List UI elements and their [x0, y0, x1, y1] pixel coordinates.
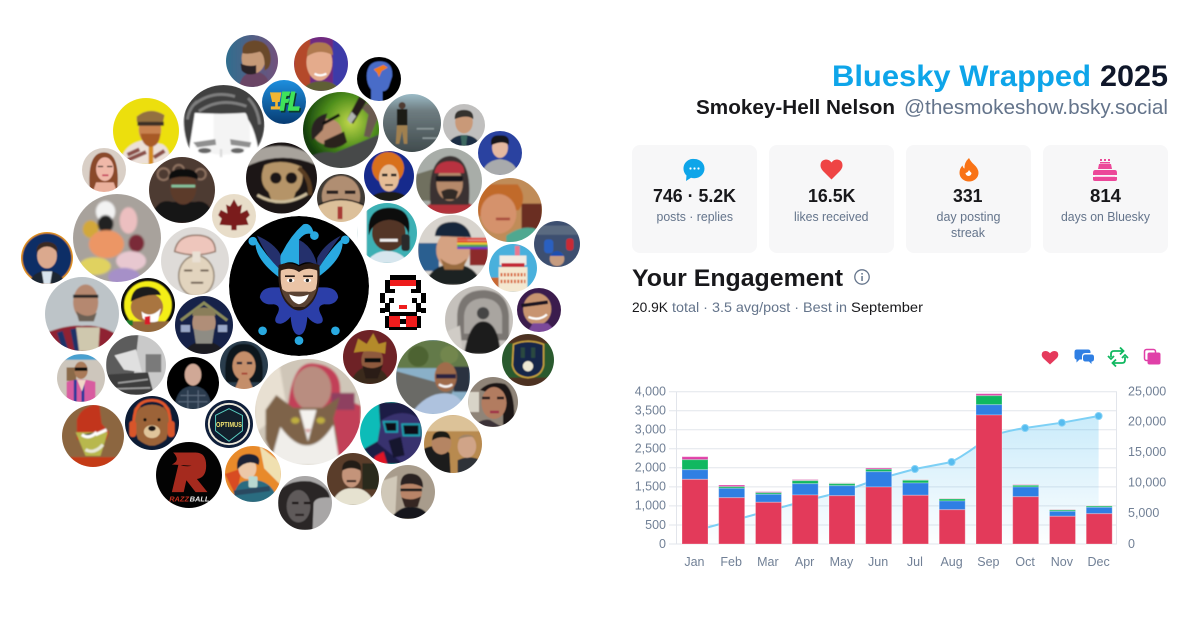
- right axis labels: 25,000: [1128, 384, 1166, 398]
- stat value: 746 · 5.2K: [653, 186, 736, 206]
- left axis labels: 4,000: [635, 384, 666, 398]
- avatar: Canadian Hickory maple leaf: [211, 193, 257, 239]
- avatar: sketched man portrait: [182, 85, 264, 158]
- chart legend: [1042, 348, 1160, 366]
- avatar: cartoon boy on yellow: [120, 277, 176, 333]
- cumulative area: [694, 416, 1099, 544]
- bar: Jun: [866, 468, 892, 544]
- avatar: wrestler king with crown: [342, 329, 398, 385]
- bar: Jul: [902, 479, 928, 544]
- bar: Nov: [1050, 509, 1076, 544]
- bar: May: [829, 483, 855, 544]
- avatar: woman with auburn hair: [81, 147, 127, 193]
- bar: Aug: [939, 498, 965, 544]
- panel: day posting streak: [906, 145, 1031, 253]
- stat value: 331: [953, 186, 982, 206]
- avatar: man in wicker chair: [444, 285, 514, 355]
- icon: likes heart: [1042, 351, 1058, 364]
- engagement summary: September: [851, 299, 923, 315]
- avatar: Razzball logo: [155, 441, 223, 509]
- avatar: orange hair cartoon: [363, 150, 415, 202]
- stat label: day posting: [936, 209, 1000, 224]
- left axis labels: 1,000: [635, 498, 666, 512]
- right axis labels: 20,000: [1128, 414, 1166, 428]
- left axis labels: 500: [645, 518, 666, 532]
- month labels: Jan: [684, 555, 705, 569]
- avatar: man in red cap and hoodie: [415, 147, 483, 215]
- avatar: man with glasses and striped jacket: [44, 276, 120, 352]
- avatar: brain x-ray head: [356, 56, 402, 102]
- stat value: 16.5K: [808, 186, 856, 206]
- avatar: two men in restaurant: [423, 414, 483, 474]
- avatar: green drinking man: [301, 90, 381, 170]
- panel: likes received: [769, 145, 894, 253]
- avatar: Darth Vader with sunglasses: [359, 401, 423, 465]
- avatar: mushroom head drawing: [160, 226, 230, 296]
- left axis labels: 0: [659, 537, 666, 551]
- bar: Sep: [976, 394, 1002, 544]
- avatar: Optimus logo badge: [204, 399, 254, 449]
- avatar: man in suit with orange ring: [20, 231, 74, 285]
- title: 2025: [1100, 60, 1168, 93]
- left axis labels: 2,000: [635, 460, 666, 474]
- right axis labels: 0: [1128, 537, 1135, 551]
- heading: Your Engagement: Your Engagement: [632, 265, 843, 292]
- stat label: likes received: [794, 209, 868, 224]
- avatar: Optimus logo badge: OPTIMUS: [216, 420, 242, 429]
- icon: heart: [820, 160, 842, 180]
- title: Bluesky Wrapped: [832, 60, 1091, 93]
- month labels: Oct: [1015, 555, 1035, 569]
- avatar: Razzball logo: BALL: [190, 494, 209, 503]
- icon: info: [855, 270, 869, 284]
- month labels: Dec: [1087, 555, 1110, 569]
- stat label: posts · replies: [656, 209, 733, 224]
- engagement summary: 20.9K: [632, 299, 669, 315]
- avatar: bald man on black: [166, 356, 220, 410]
- user name and handle: [696, 97, 1168, 119]
- engagement chart: [635, 384, 1166, 569]
- avatar: man in spider-man mask: [316, 173, 366, 223]
- panel: posts and replies: [632, 145, 757, 253]
- left axis labels: 3,000: [635, 422, 666, 436]
- stat value: 814: [1090, 186, 1121, 206]
- avatar: bear with headphones: [124, 395, 180, 451]
- icon: quotes copy squares: [1144, 350, 1160, 364]
- user name and handle: @thesmokeshow.bsky.social: [904, 97, 1168, 119]
- avatar: Brewers logo: [501, 333, 555, 387]
- avatar: skull mask: [245, 141, 318, 215]
- avatar: plush toys: [71, 192, 163, 286]
- avatar: bearded man with Optimus logo: [174, 295, 234, 355]
- left axis labels: 1,500: [635, 480, 666, 494]
- icon: flame: [960, 158, 978, 182]
- month labels: Apr: [795, 555, 814, 569]
- avatar: smiling man in grey: [442, 103, 486, 147]
- avatar: yellow background man with hat: [112, 97, 180, 165]
- avatar: stadium crowd in blue: [533, 220, 581, 268]
- bar: Feb: [719, 485, 745, 544]
- avatar: smiling man with purple tint: [516, 287, 562, 333]
- avatar: FL trophy logo: [261, 79, 307, 125]
- icon: reposts arrows: [1108, 348, 1128, 366]
- right axis labels: 10,000: [1128, 476, 1166, 490]
- avatar: red hooded cartoon: [61, 404, 125, 468]
- cumulative line: [694, 412, 1102, 531]
- user name and handle: Smokey-Hell Nelson: [696, 97, 895, 119]
- avatar: person on frozen shore: [382, 93, 442, 153]
- left axis labels: 3,500: [635, 404, 666, 418]
- left axis labels: [635, 384, 666, 551]
- chart grid and axes: [669, 392, 1117, 544]
- bar: Apr: [792, 479, 818, 544]
- bar: Dec: [1086, 505, 1112, 544]
- avatar: illustrated curly haired woman: [219, 340, 269, 390]
- left axis labels: 2,500: [635, 442, 666, 456]
- month labels: Nov: [1051, 555, 1074, 569]
- avatar cluster: [20, 34, 581, 531]
- engagement summary: [632, 299, 923, 315]
- right axis labels: 5,000: [1128, 506, 1159, 520]
- avatar: colorful building: [488, 243, 538, 293]
- right axis labels: 15,000: [1128, 445, 1166, 459]
- avatar: woman with dark hair: [467, 376, 519, 428]
- month labels: Feb: [720, 555, 742, 569]
- panel: days on Bluesky: [1043, 145, 1168, 253]
- avatar: bearded man with glasses: [380, 464, 436, 520]
- right axis labels: [1128, 384, 1166, 551]
- bar: Oct: [1013, 484, 1039, 544]
- avatar: man with rainbow laser eyes: [417, 214, 489, 286]
- avatar: pixel art Mario-like sprite: [371, 271, 435, 335]
- avatar: jester logo: [229, 216, 369, 356]
- avatar: man in colorful shirt: [56, 353, 106, 403]
- avatar: illustrated bearded man: [225, 34, 279, 88]
- month labels: Mar: [757, 555, 779, 569]
- avatar: man with glasses indoors: [148, 156, 216, 224]
- avatar: black and white woman portrait: [277, 475, 333, 531]
- bar: Jan: [682, 457, 708, 544]
- month labels: May: [830, 555, 854, 569]
- icon: replies speech bubbles: [1074, 350, 1094, 364]
- avatar: laughing man in headset: [356, 202, 418, 264]
- month labels: Aug: [940, 555, 963, 569]
- avatar: man with mustache: [326, 452, 380, 506]
- engagement summary: total · 3.5 avg/post · Best in: [672, 299, 847, 315]
- month labels: Jun: [868, 555, 888, 569]
- icon: chat bubble: [683, 159, 705, 181]
- month labels: Jul: [907, 555, 923, 569]
- avatar: tabby cat and man in red hood: [253, 357, 363, 467]
- stacked bars: [682, 394, 1112, 544]
- avatar: man with circuit background: [293, 36, 349, 92]
- stat label second line: streak: [951, 225, 985, 240]
- avatar: anime guy on orange: [224, 445, 282, 503]
- month labels: Sep: [977, 555, 1000, 569]
- avatar: young man on blue: [477, 130, 523, 176]
- bar: Mar: [756, 492, 782, 544]
- avatar: black and white photo: [105, 334, 167, 396]
- avatar: Razzball logo: RAZZ: [169, 494, 190, 503]
- month labels: [684, 555, 1110, 569]
- avatar: selfie on street: [395, 339, 471, 415]
- avatar: woman with orange hair: [477, 177, 543, 243]
- icon: cake: [1093, 159, 1117, 181]
- stat label: days on Bluesky: [1061, 209, 1150, 224]
